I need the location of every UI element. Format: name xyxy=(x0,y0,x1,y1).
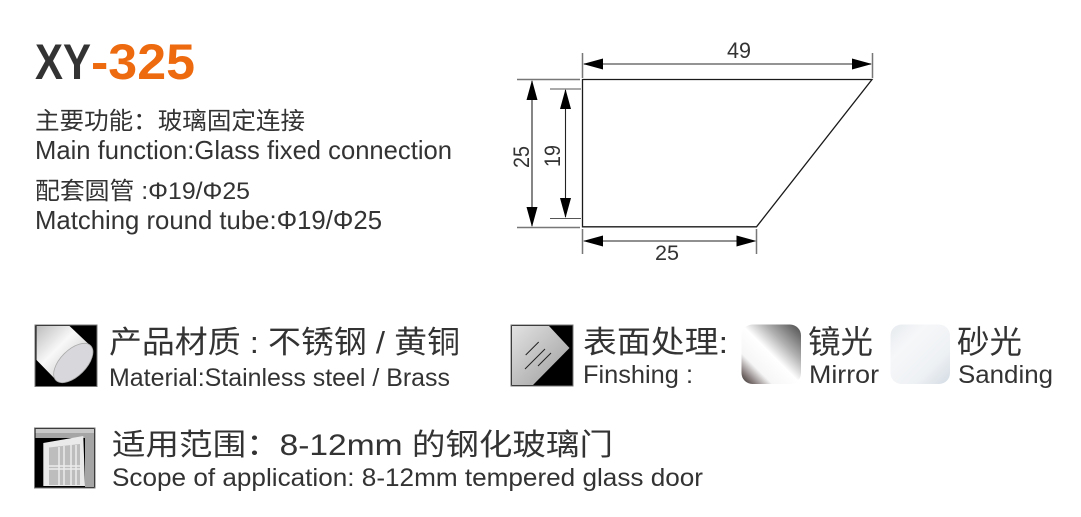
dimension: width 25 xyxy=(582,229,756,265)
text block: scope of application xyxy=(112,429,703,492)
icon: material tube xyxy=(35,325,100,390)
text block: matching round tube: Matching round tube:Φ19/Φ25 xyxy=(35,205,382,235)
text block: main function: 主要功能：玻璃固定连接 xyxy=(35,108,305,135)
technical drawing: profile cross-section xyxy=(509,38,872,265)
text block: matching round tube xyxy=(35,178,382,235)
dimension: width 25: 25 xyxy=(655,242,679,265)
title: XY xyxy=(35,34,91,90)
text block: main function xyxy=(35,108,452,165)
icon: surface glass xyxy=(511,325,573,386)
text block: finishing: Finshing : xyxy=(583,361,693,389)
text block: matching round tube: 配套圆管 :Φ19/Φ25 xyxy=(35,178,250,205)
dimension: height 19: 19 xyxy=(540,145,565,167)
text block: sanding: Sanding xyxy=(958,361,1053,389)
dimension: height 25 xyxy=(509,80,580,228)
text block: mirror: Mirror xyxy=(809,361,879,389)
text block: scope of application: 适用范围：8-12mm 的钢化玻璃门 xyxy=(112,429,613,462)
dimension: height 25: 25 xyxy=(509,146,534,168)
text block: main function: Main function:Glass fixed connection xyxy=(35,135,452,165)
open door leaf xyxy=(43,436,85,486)
profile outline xyxy=(582,80,872,227)
text block: material: 产品材质 : 不锈钢 / 黄铜 xyxy=(109,325,460,360)
text block: finishing: 表面处理: xyxy=(583,325,728,360)
text block: material: Material:Stainless steel / Brass xyxy=(109,364,450,392)
dimension: width 49: 49 xyxy=(727,38,751,63)
text block: mirror xyxy=(808,324,879,389)
text block: sanding: 砂光 xyxy=(957,324,1022,360)
dimension: height 19 xyxy=(540,89,581,218)
icon: glass door xyxy=(34,428,95,488)
title: -325 xyxy=(91,34,195,90)
door frame xyxy=(36,429,94,487)
text block: mirror: 镜光 xyxy=(808,324,873,360)
text block: material xyxy=(109,325,460,392)
title xyxy=(35,34,195,90)
swatch: mirror finish xyxy=(742,324,801,384)
swatch: sanding finish xyxy=(890,324,950,384)
text block: finishing xyxy=(583,325,728,389)
text block: sanding xyxy=(957,324,1053,389)
text block: scope of application: Scope of application: 8-12mm tempered glass door xyxy=(112,464,703,492)
dimension: width 49 xyxy=(582,38,872,78)
